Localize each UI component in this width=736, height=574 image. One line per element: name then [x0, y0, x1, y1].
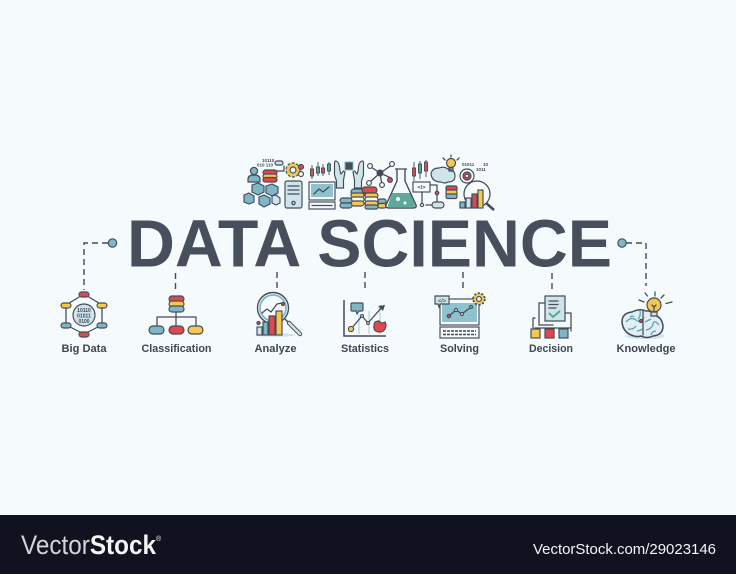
icon: gear on computer tower [276, 163, 304, 208]
icon: candlesticks [310, 162, 330, 179]
binary digits right: 10 [483, 162, 489, 167]
icon: network nodes [367, 162, 394, 187]
icon: target and magnifier with bars [460, 169, 494, 210]
icon: hands holding chip [334, 161, 364, 188]
label: solving: Solving [440, 343, 479, 355]
icon: knowledge [622, 292, 672, 339]
label: knowledge: Knowledge [616, 343, 676, 355]
connector: left dot [84, 239, 117, 290]
icon: big data: 10110 [77, 308, 91, 314]
icon: solving: </> [438, 298, 446, 304]
footer logo: VectorStock [21, 530, 157, 560]
binary digits left: 10110 [262, 158, 275, 163]
icon cluster above title [244, 155, 494, 210]
icon: flask [386, 169, 416, 208]
connector: decision [551, 273, 553, 290]
label: big data: Big Data [62, 343, 107, 355]
connector: statistics [364, 272, 366, 291]
label: decision: Decision [529, 343, 573, 355]
icon: analyze [255, 292, 300, 337]
icon: code flow diagram [413, 182, 457, 208]
binary digits left [257, 158, 283, 168]
binary digits right: 01011 [462, 162, 475, 167]
icon: database red yellow [263, 170, 277, 182]
registered mark: ® [156, 535, 162, 543]
icon: big data: 0100 [78, 319, 90, 325]
binary digits left: 010 110 [257, 162, 274, 168]
icon: big data [61, 292, 107, 337]
icon: classification [149, 296, 203, 334]
icon: solving [435, 294, 484, 338]
binary digits right: 1011 [476, 167, 486, 172]
icon: person [248, 167, 260, 182]
footer bar [0, 515, 736, 574]
connector: right dot [618, 239, 646, 286]
label: classification: Classification [142, 343, 212, 355]
binary digits right [462, 162, 489, 172]
icon: statistics [344, 300, 386, 336]
connector: analyze [276, 272, 278, 291]
icon: code flow diagram: </> [418, 185, 425, 191]
label: analyze: Analyze [254, 343, 296, 355]
connector: classification [174, 273, 176, 290]
footer url: VectorStock.com/29023146 [533, 542, 716, 558]
connector: solving [462, 272, 464, 291]
icon: monitor and keyboard [309, 182, 335, 209]
icon: candlesticks two [412, 160, 428, 181]
title: DATA SCIENCE [127, 206, 612, 282]
icon: coin stacks [340, 187, 386, 209]
icon: brain and bulb [431, 155, 459, 183]
label: statistics: Statistics [341, 343, 389, 355]
icon: decision [531, 296, 571, 338]
icon: big data: 01011 [77, 314, 91, 320]
icon: hexagon cubes [244, 183, 280, 207]
